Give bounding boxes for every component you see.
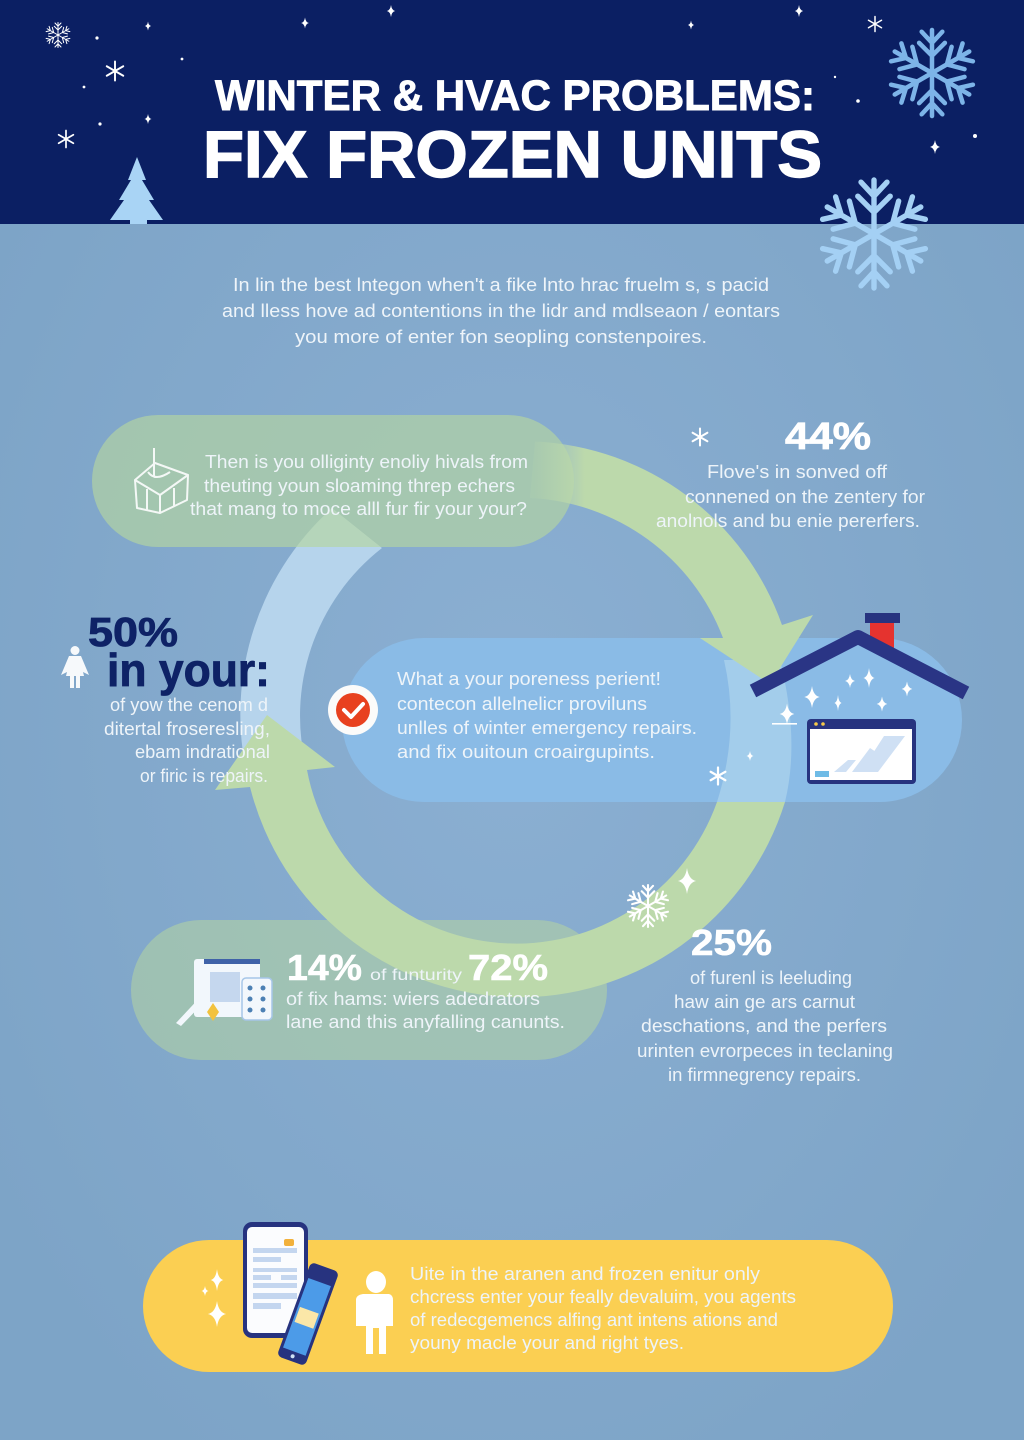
intro text: and lless hove ad contentions in the lidr and mdlseaon / eontars <box>222 301 780 321</box>
stat: 25%: haw ain ge ars carnut <box>674 992 855 1012</box>
panel: yellow call to action <box>143 1240 893 1372</box>
text: top panel <box>190 452 528 519</box>
stat: 50% in your: in your: <box>107 644 270 696</box>
stat: 44%: connened on the zentery for <box>685 487 925 507</box>
intro text: you more of enter fon seopling constenpoires. <box>295 327 707 347</box>
icon: sparkles on yellow <box>202 1269 226 1327</box>
icon: snowflake and sparkle on arc <box>627 868 696 927</box>
stat: 14% and 72%: 72% <box>468 947 548 988</box>
text: yellow panel <box>410 1264 796 1353</box>
icon: person left <box>61 646 89 688</box>
icon: pine tree <box>110 157 163 224</box>
icon: large snowflake at header edge <box>819 180 929 288</box>
icon: large snowflake top right <box>888 30 976 116</box>
text: central blue panel: unlles of winter emergency repairs. <box>397 718 697 738</box>
icon: documents and tablet <box>176 959 272 1026</box>
text: yellow panel: Uite in the aranen and frozen enitur only <box>410 1264 760 1284</box>
text: central blue panel: and fix ouitoun croairgupints. <box>397 742 655 762</box>
stat: 50% in your: ebam indrational <box>135 742 270 762</box>
stat: 25%: deschations, and the perfers <box>641 1016 887 1036</box>
text: yellow panel: of redecgemencs alfing ant intens ations and <box>410 1310 778 1330</box>
stat: 14% and 72% <box>286 947 565 1032</box>
title <box>203 72 822 191</box>
stat: 44%: 44% <box>785 416 871 458</box>
stat: 50% in your: ditertal froseresling, <box>104 719 270 739</box>
stat: 25%: 25% <box>691 922 772 963</box>
stat: 50% in your <box>88 609 270 786</box>
stat: 50% in your: or firic is repairs. <box>140 766 268 786</box>
stat: 14% and 72%: of fix hams: wiers adedrators <box>286 989 540 1009</box>
stat: 44% <box>656 416 925 531</box>
stat: 14% and 72%: 14% <box>287 947 362 988</box>
cycle arrow: bottom green <box>215 715 785 997</box>
stat: 50% in your: of yow the cenom d <box>110 695 268 715</box>
intro text: In lin the best lntegon when't a fike lnto hrac fruelm s, s pacid <box>233 275 769 295</box>
text: central blue panel: What a your poreness perient! <box>397 669 661 689</box>
text: top panel: theuting youn sloaming threp echers <box>204 476 515 496</box>
text: central blue panel: contecon allelnelicr proviluns <box>397 694 647 714</box>
header stars and small snowflakes <box>45 5 977 154</box>
icon: check badge <box>328 685 378 735</box>
icon: phones <box>243 1222 339 1366</box>
intro text <box>222 275 780 347</box>
stat: 44%: Flove's in sonved off <box>707 462 888 482</box>
stat: 25%: in firmnegrency repairs. <box>668 1065 861 1085</box>
stat: 14% and 72%: lane and this anyfalling canunts. <box>286 1012 565 1032</box>
text: central blue panel <box>397 669 697 762</box>
cycle arc: lighter section inside blue panel <box>717 660 791 802</box>
stat: 25%: urinten evrorpeces in teclaning <box>637 1041 893 1061</box>
icon: person on yellow <box>356 1271 393 1354</box>
panel: top green question <box>92 415 574 547</box>
cycle arrow: top right green <box>530 442 813 684</box>
title: FIX FROZEN UNITS <box>203 117 822 191</box>
icon: house with frost <box>711 613 966 784</box>
stat: 25% <box>637 922 893 1085</box>
icon: cake shaped unit outline <box>135 448 188 513</box>
text: top panel: that mang to moce alll fur fir your your? <box>190 499 527 519</box>
stat: 14% and 72%: of funturity <box>370 967 462 984</box>
stat: 44%: anolnols and bu enie pererfers. <box>656 511 920 531</box>
text: yellow panel: youny macle your and right tyes. <box>410 1333 684 1353</box>
text: yellow panel: chcress enter your feally devaluim, you agents <box>410 1287 796 1307</box>
cycle arc: light blue left section <box>240 508 382 787</box>
stat: 50% in your: 50% <box>88 609 178 655</box>
stat: 25%: of furenl is leeluding <box>690 968 852 988</box>
text: top panel: Then is you olliginty enoliy hivals from <box>205 452 528 472</box>
header band <box>0 0 1024 224</box>
panel: central blue <box>342 638 962 802</box>
panel: bottom green stat <box>131 920 607 1060</box>
title: WINTER & HVAC PROBLEMS: <box>215 72 815 120</box>
